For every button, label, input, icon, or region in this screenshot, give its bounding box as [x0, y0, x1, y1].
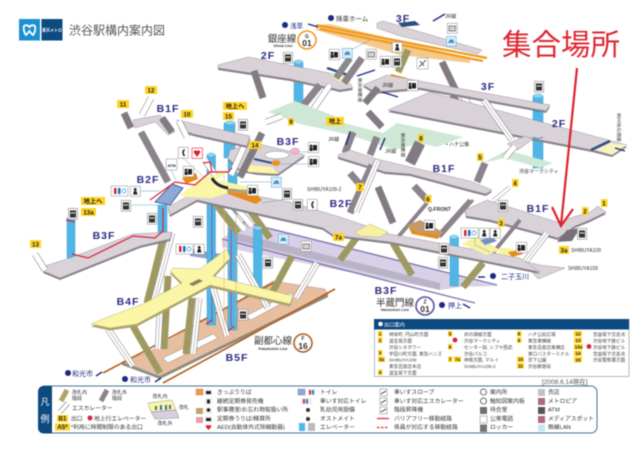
icon: locker [238, 119, 248, 130]
legend: accessibility: 車いす対応エスカレーター [394, 397, 464, 405]
floor B3F west exit 13 [35, 232, 172, 280]
icon: locker [238, 309, 248, 320]
line badge: Fukutoshin: 副都心線 [254, 335, 292, 347]
exit list column 2: 渋谷マークシティ [464, 338, 500, 344]
floor B1F west [124, 98, 250, 182]
exit list column 1: 東急百貨店本店 [389, 363, 422, 370]
exit badges on the map: 地上へ [226, 102, 244, 110]
line badge: Ginza: 銀座線 [268, 33, 297, 45]
legend: information: ロッカー [490, 424, 513, 431]
legend: information: 公衆電話 [490, 414, 513, 422]
icon: ticket [308, 156, 319, 167]
legend: accessibility: 車いすスロープ [394, 388, 434, 396]
place and direction labels: Q-FRONT [428, 207, 451, 213]
place and direction labels: 押上 [448, 301, 462, 310]
exit badges on the map: 1 [602, 200, 606, 208]
legend: accessibility: 階段昇降機 [394, 406, 423, 414]
line badge: Hanzomon: Hanzomon Line [381, 308, 409, 312]
icon: locker [439, 243, 449, 254]
icon: ticket [308, 142, 319, 153]
legend: facilities: 車いす対応トイレ [320, 397, 367, 405]
panel: exit guide [374, 319, 629, 376]
exit list column 3: 東口バスターミナル [528, 350, 570, 358]
exit list column 1: SHIBUYA109 [389, 358, 417, 362]
exit list column 1: 4 [379, 370, 382, 375]
exit list column 3: 11 [518, 364, 523, 368]
legend: stairs and exits: 階段 [72, 395, 82, 402]
icon: phone [178, 147, 188, 158]
icon: wifi [278, 234, 288, 244]
exit list column 4: 宮益坂下交差点 [593, 331, 626, 338]
icon: ticket [183, 166, 194, 177]
exit list column 2: 5 [449, 332, 452, 336]
icon: baby [194, 244, 204, 254]
line badge: Fukutoshin: Fukutoshin Line [258, 347, 288, 351]
exit list column 2: SHIBUYA109-2 [464, 364, 496, 369]
exit badges on the map: 7a [335, 234, 342, 242]
floor labels: B2F [330, 198, 352, 210]
exit list column 4: 13 [575, 338, 581, 343]
icon: locker [283, 52, 293, 63]
exit list column 1: 神泉町, 円山町方面 [389, 331, 429, 338]
legend: accessibility [377, 388, 464, 431]
exit list column 3: 渋谷郵便局 [528, 363, 551, 370]
exit list column 4: 渋谷地下鉄ビル [593, 344, 626, 351]
icon: locker [282, 188, 292, 199]
line badge: Fukutoshin: F [301, 336, 305, 342]
line badge: Hanzomon [376, 297, 434, 315]
exit badges on the map: 地上 [329, 118, 341, 126]
place and direction labels: 和光市 [72, 369, 93, 378]
icon: locker [392, 56, 402, 67]
exit list column 1: 3a [379, 357, 384, 362]
floor 3F / 2F Ginza upper left [218, 57, 362, 114]
icon: store [366, 49, 376, 59]
legend: gate diagram: 改札内 [152, 393, 168, 400]
ticket counter Q-FRONT [408, 220, 443, 239]
legend: accessibility: 係員が対応する移動経路 [394, 423, 458, 431]
legend: ticket services [196, 388, 288, 431]
exit badges on the map: 8 [419, 136, 423, 142]
icon: locker [577, 228, 587, 239]
place and direction labels: SHIBUYA109-2 [307, 187, 342, 193]
exit badges on the map: 5 [478, 154, 482, 162]
icon: store [301, 241, 311, 251]
exit list column 2 [448, 331, 513, 369]
exit badges on the map: 3a [561, 248, 568, 254]
legend: ticket services: 継続定期券発売機 [217, 397, 264, 405]
legend: stairs and exits: 改札外 [112, 389, 127, 396]
floor labels: B3F [375, 285, 397, 297]
floor 3F Ginza platform [316, 21, 487, 120]
icon: baby [130, 186, 140, 196]
exit badges on the map: 13a [83, 210, 94, 216]
legend: facilities [298, 389, 367, 431]
floor labels: B1F [527, 203, 549, 215]
line badge: Fukutoshin: 16 [298, 341, 308, 351]
floor B2F long corridor [155, 160, 540, 274]
columns: cyan elevator shafts [67, 62, 543, 330]
icon: wifi [271, 177, 281, 187]
icon: ticket [407, 80, 418, 91]
legend: stairs and exits: A5* [57, 424, 68, 431]
floor labels: B1F [157, 103, 179, 115]
exit badges on the map: 14 [252, 142, 259, 150]
icon: ticket [516, 242, 527, 253]
line badge: Fukutoshin [254, 334, 312, 352]
floor labels: 2F [261, 50, 275, 62]
floor labels: B2F [137, 174, 159, 186]
legend: ticket services: 駅事務室/お忘れ物取扱い所 [217, 406, 288, 414]
exit list column 4: 渋谷地下鉄ビル [593, 338, 626, 344]
exit list column 4 [574, 331, 626, 364]
legend: information: 触知図案内板 [490, 397, 525, 405]
legend: information [480, 388, 525, 432]
legend: facilities: オストメイト [320, 416, 355, 422]
legend: shops and services: メトロピア [548, 398, 577, 405]
floor labels: B5F [226, 352, 248, 364]
panel: legend [38, 386, 597, 434]
place and direction labels: 和光市 [130, 375, 151, 384]
legend: information: 案内所 [490, 388, 508, 396]
exit list column 3: 東急東横線 [528, 338, 551, 344]
exit list column 4: 14 [575, 351, 581, 356]
icon: locker [121, 200, 131, 211]
legend: stairs and exits: B1 [59, 416, 67, 422]
line badge: Ginza [268, 31, 316, 49]
place and direction labels: JR線 [385, 148, 396, 155]
exit badges on the map: 12 [148, 88, 155, 94]
icon: wheelchair lift [417, 58, 428, 69]
icon: ticket [380, 56, 391, 67]
exit list column 3: 8 [518, 332, 521, 336]
line badge: Hanzomon: 01 [420, 304, 430, 314]
column tie at 2F [533, 110, 543, 138]
legend: shops and services: ATM [548, 408, 560, 414]
exit badges on the map: 11 [120, 102, 127, 108]
panel: legend: 例 [40, 413, 50, 424]
legend: facilities: エレベーター [320, 423, 355, 431]
exit list column 2: 井の頭線方面 [464, 331, 492, 338]
legend: accessibility: バリアフリー移動経路 [394, 414, 452, 422]
legend: stairs and exits: 出口 [71, 414, 83, 422]
line badge: Ginza: 01 [302, 38, 312, 48]
floor B3F upper plate [228, 116, 305, 177]
floor B1F center [338, 132, 492, 243]
icon: toilets B3F [176, 244, 193, 254]
icon: ticket [247, 185, 258, 196]
exit badges on the map: 6 [426, 196, 430, 204]
place and direction labels: SHIBUYA109 [568, 266, 598, 272]
floor B4F yellow concourse [91, 175, 293, 330]
floor labels: B3F [93, 230, 115, 242]
legend: facilities: トイレ [320, 390, 338, 396]
exit list column 3: 宮下公園 [528, 356, 547, 364]
panel: legend: 凡 [40, 397, 50, 407]
cyan column caps [207, 60, 543, 239]
exit list column 2: 6 [449, 344, 452, 350]
barrier-free routes [66, 162, 234, 331]
place and direction labels [65, 13, 621, 384]
exit list column 1: 渋谷シネタワー [389, 344, 422, 351]
icon: locker [498, 200, 508, 211]
panel: exit guide: 出口案内 [384, 320, 405, 328]
icon: locker [68, 208, 78, 219]
exit list column 3: ハチ公前広場 [528, 331, 556, 338]
floor labels: B1F [433, 163, 455, 175]
place and direction labels: 東急東横線 [356, 77, 362, 103]
track: Fukutoshin line B5F [103, 281, 335, 383]
exit list column 4: 15 [575, 358, 581, 362]
place and direction labels: JR線 [382, 82, 393, 89]
direction arrows [96, 14, 625, 382]
exit list column 2: 7a [455, 357, 460, 362]
legend: gate diagram: 改札外 [157, 420, 173, 427]
exit list column 1 [378, 331, 442, 376]
icon: locker [263, 257, 273, 268]
legend: shops and services: 売店 [548, 388, 560, 396]
floor labels: 2F [552, 118, 566, 130]
place and direction labels: 二子玉川 [501, 273, 529, 281]
exit badges on the map: 7 [358, 184, 362, 192]
floor labels: 3F [481, 81, 495, 93]
icon: AED [192, 148, 202, 158]
legend: ticket services: 定期券うりば/精算所 [217, 414, 271, 422]
line badge: Ginza: Ginza Line [273, 44, 293, 48]
legend: shops and services: メディアスポット [548, 414, 594, 422]
legend: stairs and exits: 地上行エレベーター [94, 414, 146, 422]
exit list column 1: 1 [379, 332, 382, 336]
exit list column 4: 渋谷警察署方面 [593, 356, 626, 364]
icon: locker [534, 81, 544, 92]
floor labels [93, 13, 566, 364]
place and direction labels: JR線 [328, 136, 339, 143]
exit list column 3: 東急百貨店東横店 [528, 344, 565, 351]
floor 3F west [363, 75, 550, 127]
stairs and escalators [108, 200, 483, 373]
legend: stairs and exits: エスカレーター [72, 404, 113, 412]
meeting point arrow [552, 68, 577, 226]
exit badges on the map: 13 [32, 242, 39, 248]
icon: locker [438, 257, 448, 268]
exit badges on the map [30, 86, 608, 254]
platform: Hanzomon line B3F [190, 222, 497, 303]
legend: stairs and exits: *利用に時間制限のある出口 [71, 423, 143, 431]
icon: ATM [166, 159, 177, 170]
exit badges on the map: 3 [499, 220, 503, 228]
ticket counter left B2F [182, 173, 198, 184]
icon: wifi [342, 48, 352, 58]
icon: wifi [446, 36, 456, 46]
place and direction labels: 渋谷マークシティ [519, 168, 559, 175]
exit list column 3: 9 [518, 338, 521, 343]
ticket counter east [508, 250, 523, 257]
exit list column 2: センター街, シブヤ西武 [464, 344, 513, 351]
icon: toilets B2F [461, 228, 478, 238]
legend: facilities: 乳幼児用設備 [320, 406, 355, 414]
exit badges on the map: 9 [289, 119, 293, 126]
place and direction labels: 東急東横線 [400, 132, 405, 158]
header logo: 東京メトロ [42, 26, 62, 32]
exit list column 4: 宮益坂下交差点 [593, 350, 626, 358]
ticket counter center B2F [227, 188, 262, 204]
place and direction labels: SHIBUYA109 [571, 248, 601, 254]
line badge: Hanzomon: Z [423, 300, 427, 306]
exit badges on the map: 地上へ [84, 198, 102, 206]
icon: locker [193, 216, 203, 227]
exit list column 1: 宇田川町方面, 東急ハンズ [389, 350, 442, 358]
exit badges on the map: 15 [225, 114, 232, 120]
meeting point heading: 集合場所 [502, 29, 620, 62]
legend: stairs and exits: 階段 [112, 395, 122, 402]
place and direction labels: 浅草 [290, 21, 304, 30]
place and direction labels: 降車ホーム [336, 14, 369, 23]
floor B1F east [465, 187, 606, 279]
legend: ticket services: きっぷうりば [217, 388, 252, 396]
exit list column 4: 12 [575, 332, 581, 336]
floor 2F mark city corridor [388, 92, 627, 158]
legend: stairs and exits: 改札内 [72, 389, 87, 396]
ground level green zones [268, 101, 553, 168]
exit list column 3 [517, 331, 570, 370]
line badge: Hanzomon: 半蔵門線 [376, 297, 414, 309]
line badge: Ginza: G [305, 34, 309, 40]
icon: baby [479, 228, 489, 238]
date stamp: [2008.6.14現在] [542, 377, 588, 386]
icon: store [447, 23, 457, 33]
exit list column 2: 渋谷パルコ [464, 350, 487, 358]
exit badges on the map: 2 [583, 208, 587, 216]
floor labels: B3F [277, 136, 299, 148]
icon: ostomate [490, 228, 500, 238]
exit list column 1: 3 [379, 350, 382, 356]
map icons and service leader lines [68, 23, 587, 320]
legend: shops and services: 無線LAN [548, 423, 571, 431]
legend: shops and services [538, 388, 594, 432]
place and direction labels: 京王井の頭線 [616, 113, 621, 143]
icon: phone [307, 199, 317, 210]
legend: stairs and exits [55, 389, 146, 431]
icon: locker [147, 213, 157, 224]
floor labels: B4F [117, 296, 139, 308]
legend: information: 待合室 [490, 406, 508, 414]
exit list column 3: 10 [518, 357, 523, 362]
exit list column 2: 神南方面, マルイ [464, 356, 499, 364]
exit list column 2: 7 [449, 357, 452, 362]
header logo [19, 19, 62, 40]
exit list column 1: 道玄坂下方面 [389, 370, 417, 376]
title: 渋谷駅構内案内図 [69, 24, 165, 38]
exit list column 4: 13a [575, 344, 583, 350]
exit badges on the map: 10 [184, 112, 191, 118]
floor labels: 3F [396, 13, 410, 25]
icon: locker [293, 199, 303, 210]
icon: ticket [424, 220, 435, 231]
legend: ticket services: AED(自動体外式除細動器) [217, 423, 285, 431]
exit list column 1: 道玄坂方面 [389, 338, 412, 344]
icon: ticket [329, 49, 340, 60]
icon: ATM: ATM [167, 163, 176, 168]
legend: gate diagram [148, 393, 189, 427]
place and direction labels: JR線 [445, 13, 456, 20]
exit list column 1: 2 [379, 338, 382, 343]
icon: waiting room [392, 42, 402, 52]
icon: toilets west [111, 186, 128, 196]
place and direction labels: • ハチ公像 [446, 141, 469, 148]
exit badges on the map: 4 [513, 180, 517, 188]
legend: gate diagram: 改札 [179, 404, 189, 411]
